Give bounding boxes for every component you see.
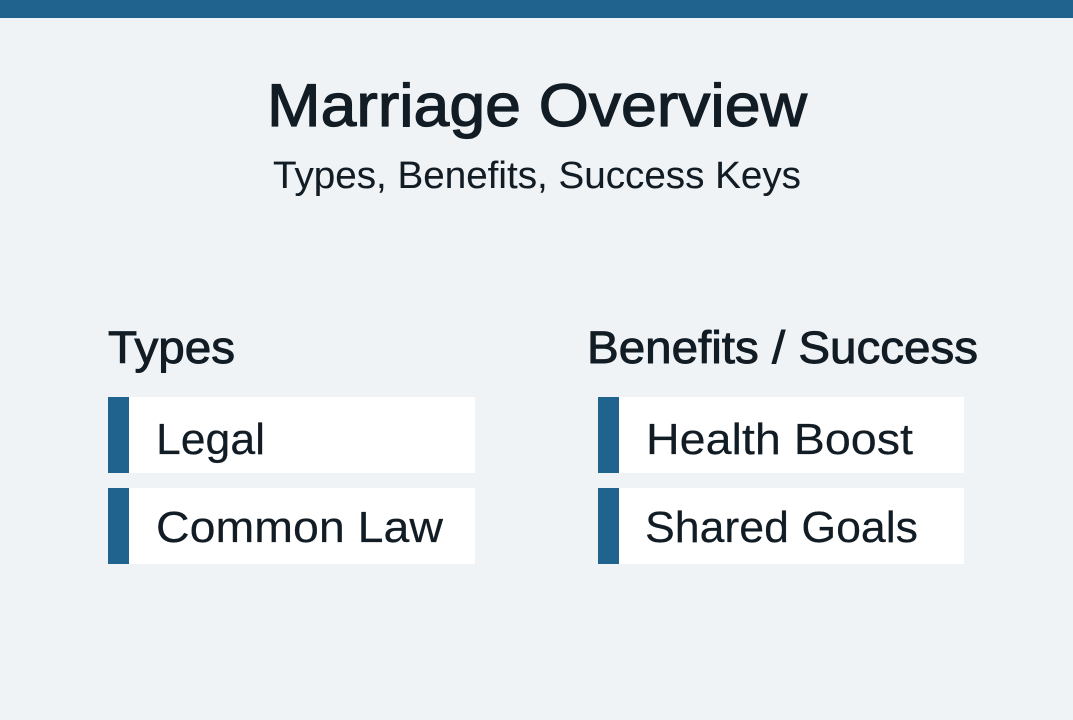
item: shared goals: Shared Goals: [645, 503, 918, 552]
item: health boost: Health Boost: [646, 415, 913, 464]
item: legal: [108, 397, 475, 473]
panel: types: [108, 322, 475, 564]
item: shared goals: [598, 488, 964, 564]
top bar: [0, 0, 1073, 18]
item: common law: [108, 488, 475, 564]
heading: benefits and success: Benefits / Success: [587, 322, 978, 373]
item: legal: Legal: [156, 415, 265, 464]
subtitle: Types, Benefits, Success Keys: [273, 155, 801, 197]
heading: types: Types: [108, 322, 235, 373]
item: health boost: [598, 397, 964, 473]
title: Marriage Overview: [267, 72, 808, 139]
item: common law: Common Law: [156, 503, 443, 552]
panel: benefits and success: [587, 322, 978, 564]
